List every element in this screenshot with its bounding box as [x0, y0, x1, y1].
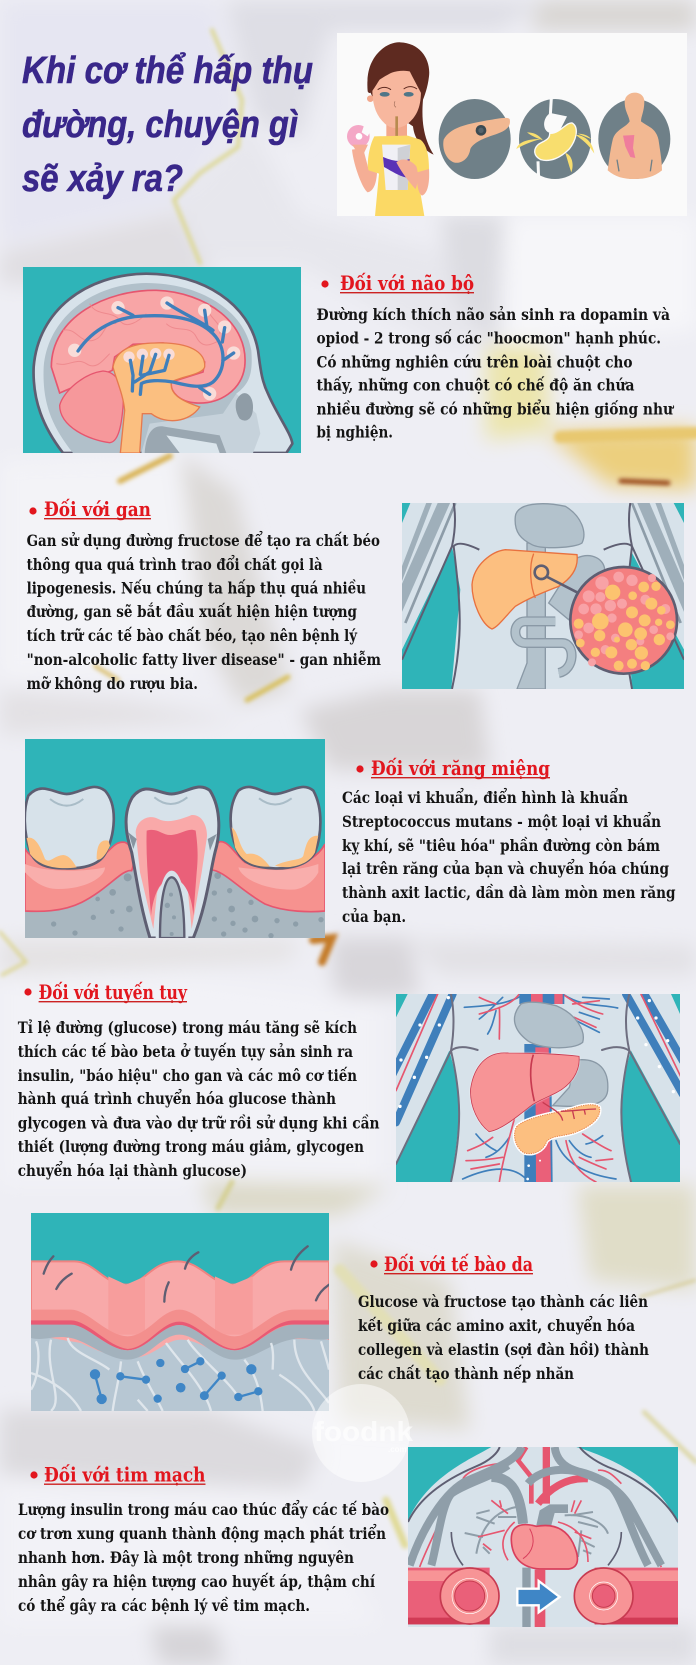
text: skin: Glucose và fructose tạo thành các liên — [358, 1292, 648, 1311]
text: pancreas: Tỉ lệ đường (glucose) trong máu tăng sẽ kích — [18, 1018, 357, 1037]
arrow — [517, 1581, 560, 1612]
hairs — [44, 1246, 329, 1302]
title — [22, 50, 313, 200]
heading: liver: Đối với gan — [44, 497, 151, 521]
text: brain: nhiều đường sẽ có những biểu hiện giống như — [316, 397, 674, 418]
text: pancreas: chuyển hóa lại thành glucose) — [18, 1159, 247, 1180]
panel: teeth illustration — [25, 739, 325, 938]
heading: heart: Đối với tim mạch — [44, 1462, 206, 1486]
text: heart — [18, 1498, 389, 1615]
text: pancreas: glycogen và đưa vào dự trữ rồi sử dụng khi cần — [18, 1114, 380, 1132]
text: pancreas — [18, 1018, 380, 1180]
text: liver: đường, gan sẽ bắt đầu xuất hiện hiện tượng — [27, 601, 357, 621]
panel: pancreas illustration — [396, 994, 680, 1182]
centre tooth cross-section — [126, 787, 219, 938]
panel: brain illustration — [23, 267, 301, 453]
heading: pancreas: Đối với tuyến tụy — [39, 980, 187, 1004]
stomach and intestines — [515, 504, 605, 689]
text: heart: Lượng insulin trong máu cao thúc đẩy các tế bào — [18, 1498, 389, 1519]
text: brain: Đường kích thích não sản sinh ra dopamin và — [316, 305, 670, 324]
title: đường, chuyện gì — [22, 104, 298, 146]
text: pancreas: hành quá trình chuyển hóa glucose thành — [18, 1087, 336, 1108]
text: heart: nhân gây ra hiện tượng cao huyết áp, thậm chí — [18, 1572, 376, 1591]
text: liver — [27, 529, 381, 693]
text: brain: Có những nghiên cứu trên loài chuột cho — [316, 352, 633, 371]
icon: stomach — [516, 98, 594, 180]
text: liver: mỡ không do rượu bia. — [27, 674, 198, 693]
text: brain: opiod - 2 trong số các "hoocmon" hạnh phúc. — [316, 329, 661, 348]
brain cerebrum — [51, 290, 245, 403]
liver organ — [472, 550, 577, 629]
text: teeth: của bạn. — [342, 907, 406, 926]
text: liver: lipogenesis. Nếu chúng ta hấp thụ quá nhiều — [27, 579, 366, 598]
text: brain: thấy, những con chuột có chế độ ăn chứa — [316, 376, 634, 395]
text: liver: tích trữ các tế bào chất béo, tạo nên bệnh lý — [27, 626, 358, 645]
collagen fibres — [31, 1338, 329, 1411]
text: pancreas: thiết (lượng đường trong máu giảm, glycogen — [18, 1137, 364, 1156]
heading: teeth: Đối với răng miệng — [371, 756, 550, 780]
text: teeth: kỵ khí, sẽ "tiêu hóa" phần đường còn bám — [342, 836, 660, 855]
panel: heart illustration — [408, 1447, 678, 1627]
gums — [25, 842, 325, 912]
header illustration: woman with drink and organs — [337, 33, 687, 216]
nerve pathways — [68, 296, 240, 400]
text: teeth: thành axit lactic, dần dà làm mòn men răng — [342, 883, 676, 902]
text: teeth: Các loại vi khuẩn, điển hình là khuẩn — [342, 786, 628, 807]
liver with outline — [471, 1053, 579, 1131]
heading: brain: Đối với não bộ — [340, 271, 474, 295]
text: liver: Gan sử dụng đường fructose để tạo ra chất béo — [27, 529, 380, 550]
stomach and heart in grey — [514, 1002, 608, 1106]
text: heart: cơ trơn xung quanh thành động mạch phát triển — [18, 1522, 386, 1543]
text: teeth — [342, 786, 676, 926]
text: skin: collegen và elastin (sợi đàn hồi) thành — [358, 1340, 649, 1359]
heading: skin: Đối với tế bào da — [384, 1252, 533, 1276]
title: Khi cơ thể hấp thụ — [22, 50, 313, 92]
panel: skin illustration — [31, 1213, 329, 1411]
text: skin: kết giữa các amino axit, chuyển hóa — [358, 1314, 635, 1335]
icon: body with heart — [598, 93, 670, 179]
heart organ — [511, 1525, 577, 1569]
tooth right with plaque — [231, 787, 320, 868]
magnifier with fat cells — [570, 567, 677, 674]
text: skin — [358, 1292, 649, 1383]
tooth left with plaque — [25, 787, 114, 868]
aorta — [398, 994, 675, 1182]
panel: liver illustration — [402, 503, 684, 689]
text: liver: thông qua quá trình trao đổi chất gọi là — [27, 553, 323, 574]
title: sẽ xảy ra? — [22, 158, 183, 200]
watermark logo: foodnk — [314, 1416, 413, 1447]
text: skin: các chất tạo thành nếp nhăn — [358, 1364, 574, 1383]
pancreas organ — [515, 1105, 600, 1154]
icon: pancreas — [439, 99, 511, 179]
text: liver: "non-alcoholic fatty liver disease" - gan nhiễm — [27, 650, 381, 669]
woman — [347, 42, 434, 216]
glucose molecule links — [91, 1358, 261, 1403]
text: pancreas: thích các tế bào beta ở tuyến tụy sản sinh ra — [18, 1042, 353, 1061]
text: brain — [316, 305, 674, 442]
text: pancreas: insulin, "báo hiệu" cho gan và các mô cơ tiến — [18, 1066, 357, 1085]
text: teeth: lại trên răng của bạn và chuyển hóa chúng — [342, 857, 669, 878]
cerebellum — [60, 371, 123, 443]
text: teeth: Streptococcus mutans - một loại vi khuẩn — [342, 810, 661, 831]
text: heart: có thể gây ra các bệnh lý về tim mạch. — [18, 1594, 310, 1615]
text: heart: nhanh hơn. Đây là một trong những nguyên — [18, 1548, 354, 1567]
watermark logo: .com — [388, 1445, 407, 1454]
text: brain: bị nghiện. — [316, 423, 393, 442]
watermark logo — [312, 1384, 413, 1482]
brain stem and midbrain — [113, 343, 205, 453]
vessels with blood flow — [408, 1568, 678, 1627]
pulmonary vessels near heart — [536, 1504, 568, 1525]
